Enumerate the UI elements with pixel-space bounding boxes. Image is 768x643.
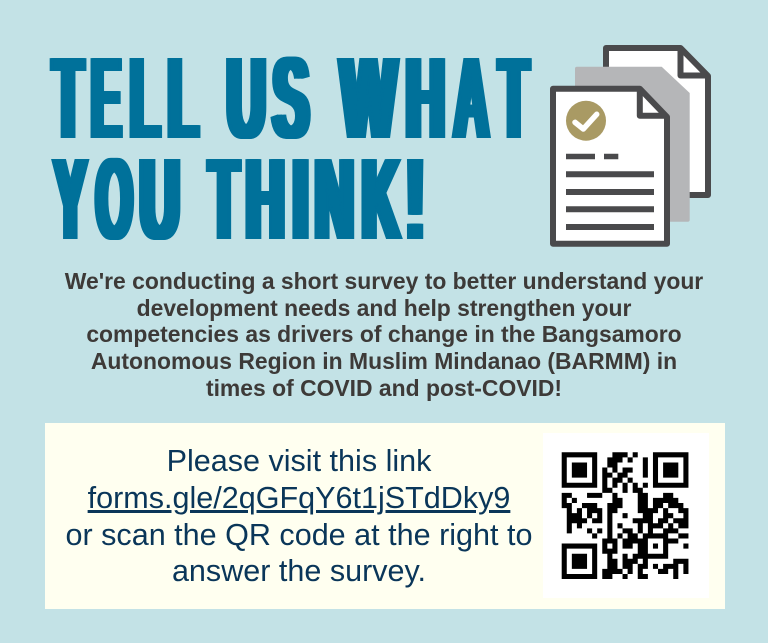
survey link: forms.gle/2qGFqY6t1jSTdDky9 xyxy=(88,481,510,515)
description text: Autonomous Region in Muslim Mindanao (BARMM) in xyxy=(91,348,677,374)
front document xyxy=(553,89,667,244)
description text: development needs and help strengthen your xyxy=(137,295,631,321)
description text: We're conducting a short survey to better understand your xyxy=(65,268,703,294)
title line 1: S xyxy=(273,33,309,163)
title line 1 xyxy=(50,33,532,163)
title line 2: ! xyxy=(406,134,424,264)
title line 1: H xyxy=(406,33,445,163)
title line 2: U xyxy=(140,134,179,264)
title line 2: O xyxy=(96,134,132,264)
description text xyxy=(64,268,703,401)
instructions text: Please visit this link xyxy=(167,444,431,478)
title xyxy=(50,33,532,264)
title line 1: U xyxy=(227,33,266,163)
description text: competencies as drivers of change in the Bangsamoro xyxy=(86,321,682,347)
panel: call to action xyxy=(45,423,725,609)
title line 1: L xyxy=(168,33,198,163)
instructions text: answer the survey. xyxy=(172,554,426,588)
document text lines xyxy=(566,154,654,230)
icon: check badge xyxy=(566,101,606,141)
QR code xyxy=(543,433,709,598)
back document xyxy=(606,48,708,195)
title line 2: I xyxy=(293,134,308,264)
title line 1: E xyxy=(91,33,121,163)
title line 2: H xyxy=(246,134,285,264)
title line 2: K xyxy=(362,134,400,264)
title line 1: T xyxy=(499,33,528,163)
grey middle document xyxy=(575,67,690,222)
title line 2: Y xyxy=(54,134,86,264)
title line 1: L xyxy=(130,33,160,163)
title line 1: T xyxy=(53,33,83,163)
title line 2: N xyxy=(315,134,354,264)
title line 1: W xyxy=(341,33,396,163)
description text: times of COVID and post-COVID! xyxy=(206,375,562,401)
instructions text: or scan the QR code at the right to xyxy=(66,518,532,552)
instructions text xyxy=(66,444,532,588)
title line 2: T xyxy=(209,134,239,264)
title line 2 xyxy=(51,134,424,264)
title line 1: A xyxy=(454,33,489,163)
